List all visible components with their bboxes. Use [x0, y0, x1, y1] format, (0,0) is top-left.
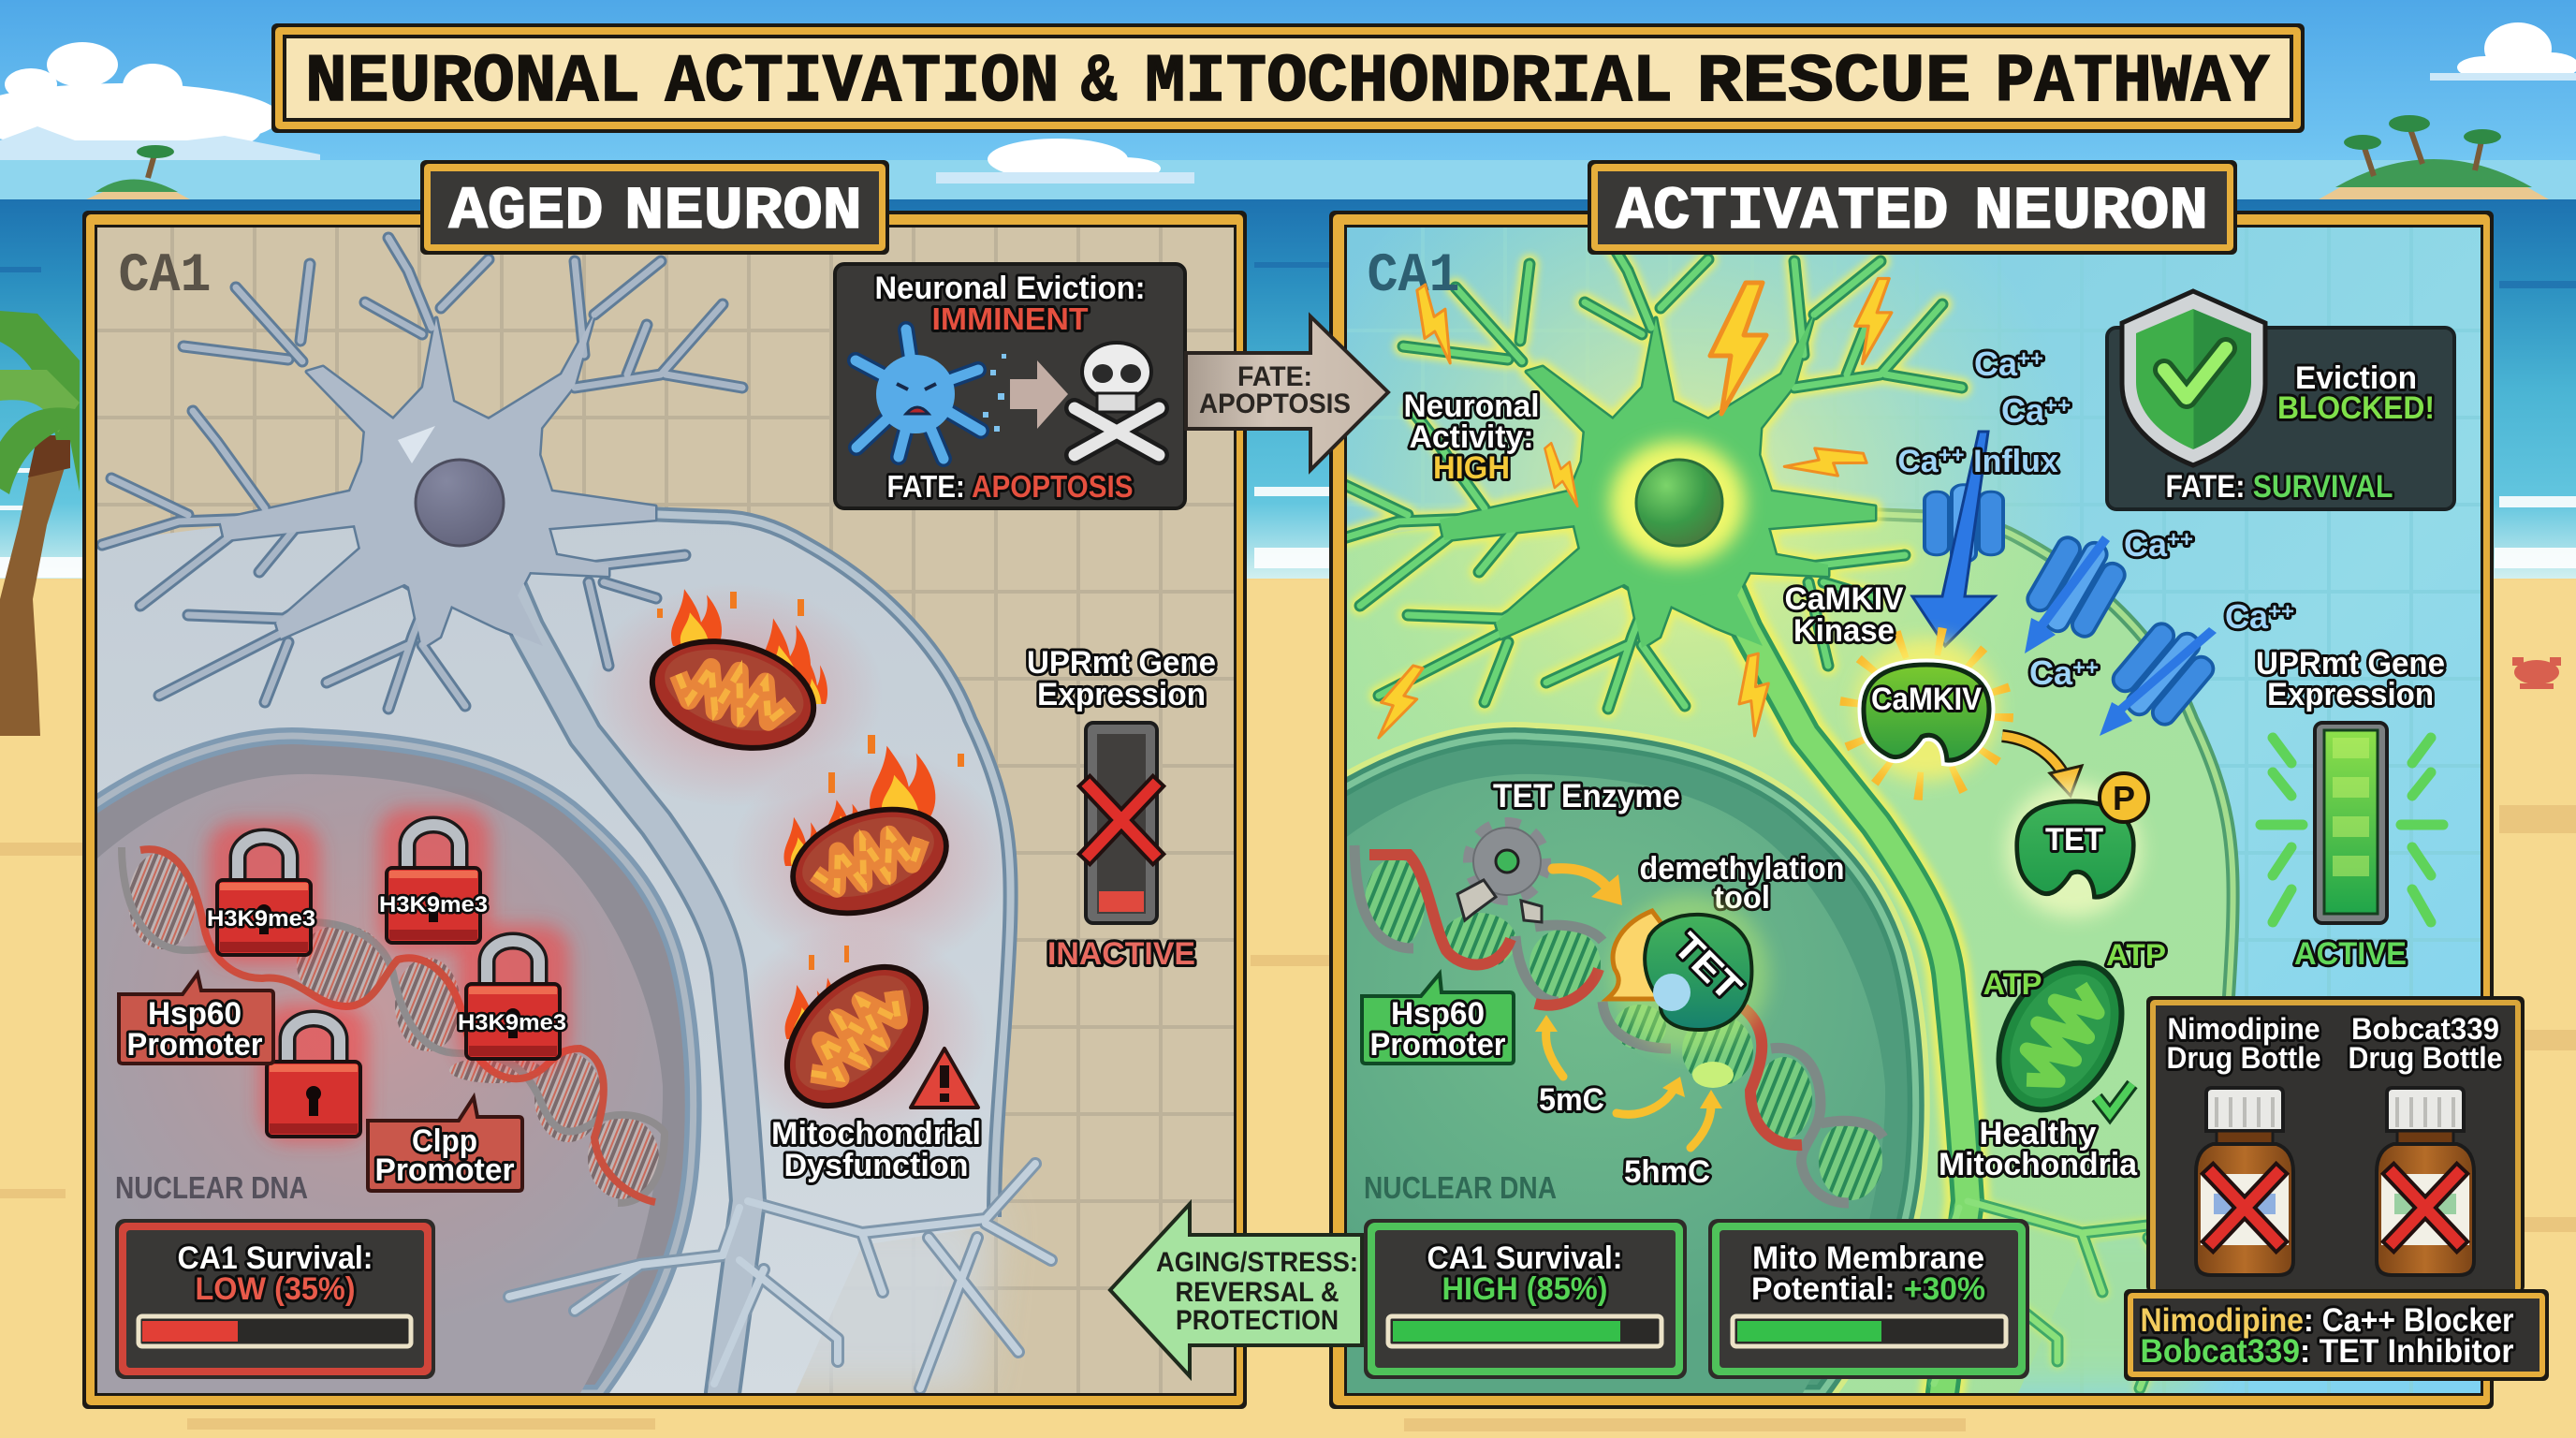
warning icon: [911, 1049, 978, 1108]
UPRmt gauge inactive: INACTIVE: [1047, 936, 1195, 972]
icon: skull and crossbones: [1075, 343, 1159, 455]
right island: [2319, 115, 2549, 199]
callout: Hsp60 promoter: Promoter: [1370, 1027, 1505, 1063]
callout: Hsp60 promoter: Hsp60: [148, 996, 242, 1032]
arrow to skull: [1010, 360, 1068, 429]
stat: CA1 survival low: LOW (35%): [195, 1271, 356, 1307]
arrow: aging stress reversal and protection: AGING/STRESS:: [1156, 1247, 1358, 1278]
enzyme: CaMKIV: [1853, 638, 1999, 786]
arrow: aging stress reversal and protection: REVERSAL &: [1176, 1277, 1339, 1308]
nucleus: [56, 736, 694, 1393]
label: CaMKIV kinase: CaMKIV: [1784, 581, 1904, 617]
calcium labels: Ca: [2029, 653, 2072, 692]
callout: Clpp promoter: Clpp: [412, 1123, 477, 1159]
callout: neuronal eviction: Neuronal Eviction:: [874, 271, 1146, 306]
label: Bobcat339 bottle: Drug Bottle: [2348, 1041, 2503, 1075]
icon: lightning bolts: [1372, 279, 1892, 745]
markers: 5mC and 5hmC: [1535, 1015, 1722, 1190]
callout: Clpp promoter: Promoter: [374, 1152, 515, 1188]
neuron: [102, 238, 1051, 1393]
callout: Hsp60 promoter: Hsp60: [1391, 996, 1485, 1032]
label: nuclear DNA: NUCLEAR DNA: [115, 1170, 308, 1205]
histone locks: H3K9me3: [458, 1010, 566, 1035]
calcium labels: ++: [2167, 527, 2193, 552]
callout: eviction blocked: [2107, 291, 2454, 509]
soma nucleus: [1636, 460, 1722, 546]
title text: NEURONAL: [305, 44, 640, 121]
label: CA1: CA1: [1367, 246, 1460, 307]
histone locks: H3K9me3: [379, 892, 488, 917]
UPRmt gauge inactive: Expression: [1037, 677, 1206, 712]
stat: CA1 survival high: HIGH (85%): [1442, 1271, 1608, 1307]
arrow: fate apoptosis: FATE:: [1237, 361, 1312, 392]
label: mitochondrial dysfunction: Dysfunction: [784, 1148, 968, 1183]
panel: aged neuron: [56, 211, 1247, 1409]
cell body: [1279, 506, 2233, 1393]
legend: drug functions: Bobcat339: TET Inhibitor: [2140, 1333, 2514, 1370]
label: CaMKIV kinase: [1784, 581, 1904, 649]
label: neuronal activity: HIGH: [1433, 450, 1510, 486]
label: nuclear DNA: NUCLEAR DNA: [1364, 1170, 1557, 1205]
arrow: CaMKIV to TET: [2002, 736, 2082, 796]
calcium labels: ++: [1939, 443, 1965, 468]
markers: 5mC and 5hmC: 5hmC: [1624, 1154, 1710, 1190]
healthy mitochondria: ATP: [2106, 938, 2166, 972]
legend: drug functions: Nimodipine: Ca++ Blocker: [2140, 1302, 2514, 1339]
markers: 5mC and 5hmC: 5mC: [1539, 1082, 1604, 1118]
tab: aged neuron heading: AGED: [449, 179, 603, 246]
label: neuronal activity: Activity:: [1410, 419, 1533, 455]
callout: Hsp60 promoter: Promoter: [127, 1027, 262, 1063]
icon: Nimodipine bottle blocked: [2196, 1088, 2293, 1275]
callout: Clpp promoter: [368, 1097, 522, 1191]
UPRmt gauge active: UPRmt Gene: [2256, 646, 2445, 682]
enzyme: TET on DNA: [1607, 895, 1769, 1052]
stat: mito membrane potential: [1708, 1219, 2029, 1379]
label: Bobcat339 bottle: [2348, 1012, 2503, 1075]
tab: aged neuron heading: NEURON: [624, 179, 862, 246]
tab: aged neuron heading: [420, 160, 889, 255]
DNA helix: [122, 847, 665, 1203]
label: neuronal activity: [1404, 389, 1539, 486]
calcium labels: ++: [2072, 655, 2099, 681]
arrow: fate apoptosis: [1186, 316, 1388, 470]
label: CA1: CA1: [118, 246, 212, 307]
label: Nimodipine bottle: Nimodipine: [2168, 1012, 2320, 1046]
healthy mitochondria: Mitochondria: [1939, 1147, 2138, 1182]
label: demethylation tool: [1640, 851, 1844, 916]
enzyme: phosphorylated TET: P: [2113, 779, 2135, 817]
callout: eviction blocked: BLOCKED!: [2277, 390, 2435, 426]
palm tree: [0, 311, 80, 736]
UPRmt gauge active: Expression: [2267, 677, 2434, 712]
tab: activated neuron heading: ACTIVATED: [1616, 179, 1949, 246]
DNA helix: [1354, 845, 1883, 1203]
title text: [305, 44, 2270, 121]
enzyme: phosphorylated TET: TET: [2045, 822, 2103, 858]
title banner: [271, 23, 2305, 133]
stat: CA1 survival high: [1364, 1219, 1687, 1379]
UPRmt gauge inactive: [1027, 645, 1216, 972]
histone locks: H3K9me3: [207, 906, 315, 932]
callout: neuronal eviction: IMMINENT: [932, 301, 1088, 336]
calcium labels: Influx: [1965, 444, 2058, 479]
panel: drug bottles: [2146, 996, 2525, 1292]
neuron: [1347, 251, 2155, 1393]
arrow: aging stress reversal and protection: [1110, 1204, 1362, 1376]
title text: PATHWAY: [1996, 44, 2270, 121]
label: Bobcat339 bottle: Bobcat339: [2351, 1012, 2499, 1046]
title text: RESCUE: [1696, 44, 1971, 121]
callout: neuronal eviction: [835, 264, 1185, 508]
callout: Hsp60 promoter: [1362, 974, 1514, 1064]
healthy mitochondria: ATP: [1983, 967, 2042, 1001]
clouds: [0, 22, 2576, 183]
callout: eviction blocked: FATE: SURVIVAL: [2166, 469, 2393, 505]
icon: sad neuron: [856, 330, 1006, 459]
title text: MITOCHONDRIAL: [1145, 44, 1673, 121]
stat: mito membrane potential: Mito Membrane: [1752, 1240, 1984, 1276]
icon: gear: [1457, 824, 1544, 922]
calcium labels: ++: [2017, 346, 2043, 372]
soma nucleus: [416, 460, 504, 546]
label: Nimodipine bottle: Drug Bottle: [2166, 1041, 2321, 1075]
label: Nimodipine bottle: [2166, 1012, 2321, 1075]
healthy mitochondria: [1939, 938, 2166, 1182]
stat: mito membrane potential: Potential: +30%: [1751, 1271, 1985, 1307]
left island: [86, 145, 190, 199]
cell body: [56, 506, 1011, 1393]
arrow: gear to TET: [1553, 869, 1622, 905]
title text: ACTIVATION: [665, 44, 1060, 121]
label: demethylation tool: tool: [1714, 880, 1770, 916]
arrow: fate apoptosis: APOPTOSIS: [1199, 389, 1351, 419]
label: mitochondrial dysfunction: [771, 1116, 981, 1183]
healthy mitochondria: Healthy: [1979, 1116, 2097, 1152]
enzyme: phosphorylated TET: [2006, 773, 2148, 917]
UPRmt gauge active: [2256, 646, 2445, 972]
icon: shield: [2122, 291, 2265, 465]
callout: eviction blocked: Eviction: [2295, 360, 2417, 396]
enzyme: TET on DNA: TET: [1666, 925, 1749, 1008]
UPRmt gauge active: ACTIVE: [2294, 936, 2407, 972]
calcium labels: Ca: [2124, 525, 2167, 564]
nucleus: [1279, 736, 1916, 1393]
calcium labels: Ca: [1974, 345, 2017, 383]
icon: Bobcat339 bottle blocked: [2377, 1088, 2474, 1275]
enzyme: CaMKIV: CaMKIV: [1871, 682, 1982, 717]
calcium channels and arrows: [1912, 432, 2223, 736]
label: demethylation tool: demethylation: [1640, 851, 1844, 887]
calcium labels: ++: [2044, 393, 2071, 418]
panel: activated neuron: [1329, 211, 2494, 1409]
calcium labels: Ca: [1897, 444, 1939, 479]
title text: &: [1081, 44, 1117, 121]
calcium labels: ++: [2268, 599, 2294, 624]
callout: neuronal eviction: FATE: APOPTOSIS: [887, 469, 1133, 504]
callout: Hsp60 promoter: [119, 974, 273, 1064]
label: mitochondrial dysfunction: Mitochondrial: [771, 1116, 981, 1152]
arrow: aging stress reversal and protection: PROTECTION: [1176, 1305, 1339, 1336]
stat: CA1 survival low: CA1 Survival:: [178, 1240, 373, 1276]
label: neuronal activity: Neuronal: [1404, 389, 1539, 424]
histone locks: [207, 808, 570, 1142]
stat: CA1 survival low: [115, 1219, 435, 1379]
tab: activated neuron heading: NEURON: [1974, 179, 2208, 246]
crab: [2512, 657, 2561, 689]
tab: activated neuron heading: [1588, 160, 2237, 255]
calcium labels: Ca: [2001, 391, 2044, 430]
label: TET enzyme: TET Enzyme: [1493, 778, 1680, 814]
calcium labels: [1897, 345, 2294, 692]
label: CaMKIV kinase: Kinase: [1793, 613, 1895, 649]
UPRmt gauge inactive: UPRmt Gene: [1027, 645, 1216, 681]
mitochondria damaged: [640, 589, 981, 1183]
calcium labels: Ca: [2225, 597, 2268, 636]
legend: drug functions: [2124, 1289, 2549, 1381]
stat: CA1 survival high: CA1 Survival:: [1427, 1240, 1623, 1276]
